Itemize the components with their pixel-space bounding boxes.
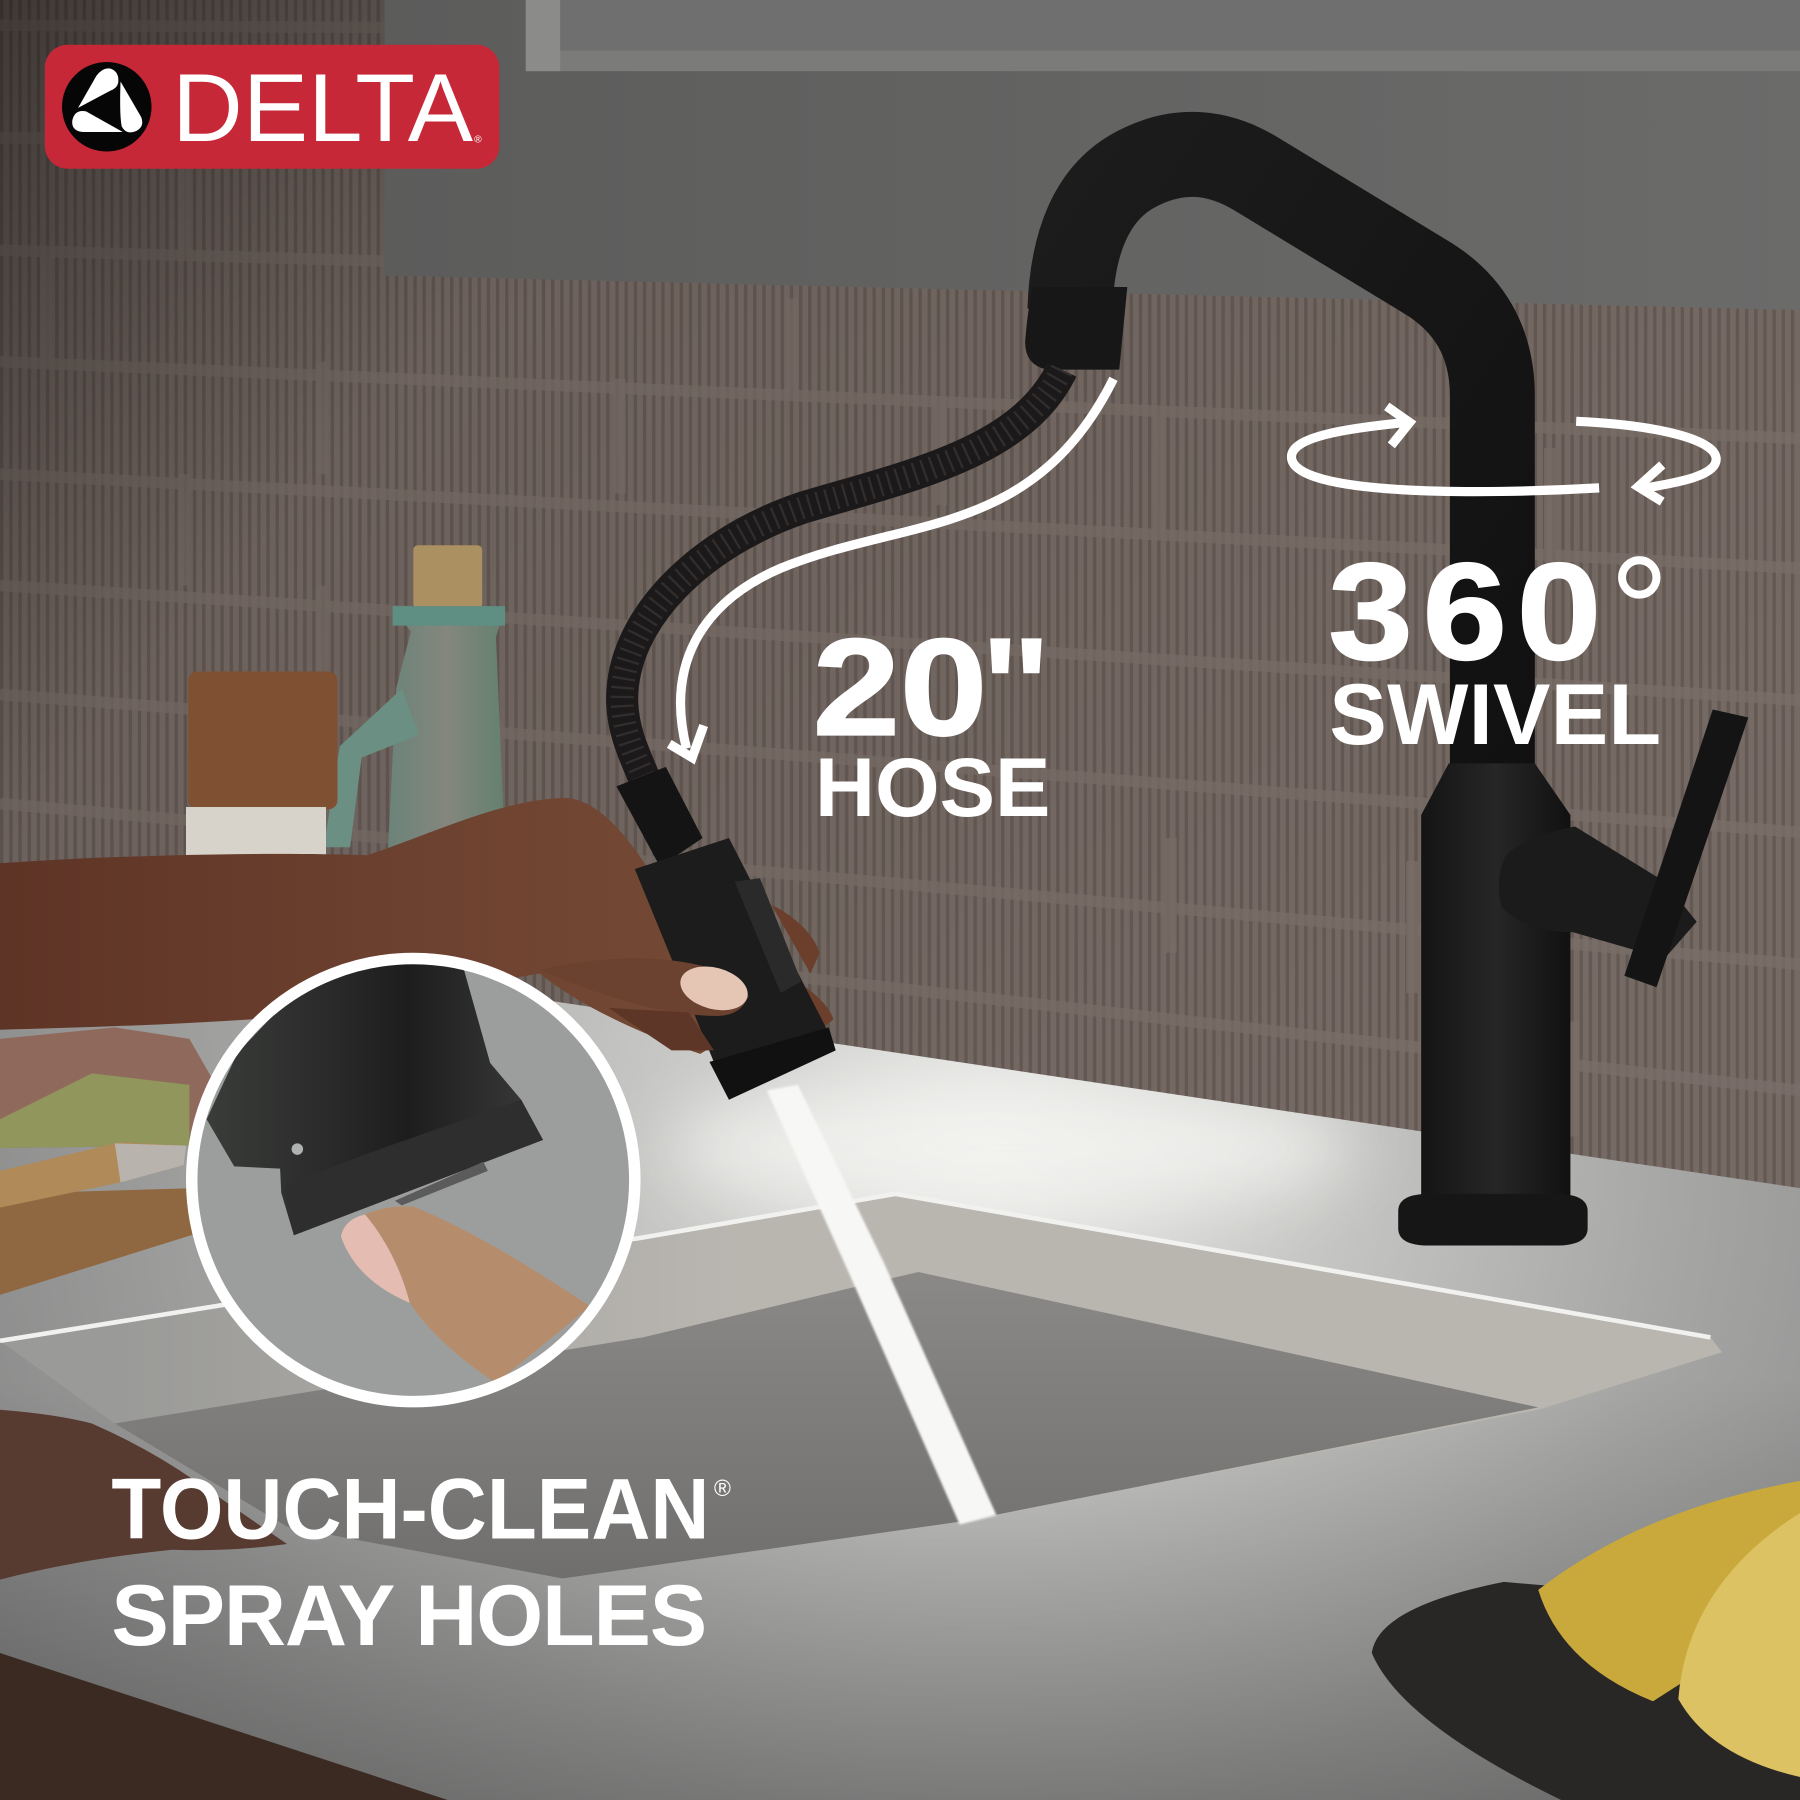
callout: 20 inch label: 20 — [813, 611, 987, 765]
pull-down sprayer head — [616, 767, 836, 1100]
logo wordmark: DELTA — [172, 55, 474, 162]
spray holes — [395, 1162, 488, 1205]
registered mark: ® — [474, 134, 482, 145]
arm and hand holding sprayer — [0, 798, 833, 1054]
fingernail — [341, 1215, 410, 1303]
faucet — [1025, 154, 1748, 1246]
heading: spray holes: SPRAY HOLES — [111, 1568, 707, 1664]
thumb and fingernail — [540, 958, 753, 1050]
tiled kitchen wall — [0, 0, 1800, 1263]
finger pressing spray holes — [365, 1206, 590, 1383]
faucet base column — [1421, 763, 1570, 1205]
lever — [1624, 709, 1748, 987]
wood cabinet below counter — [0, 1653, 448, 1800]
callout: 360 swivel arrow — [1291, 406, 1716, 502]
water stream — [767, 1085, 996, 1524]
registered mark: ® — [714, 1475, 731, 1501]
countertop — [0, 918, 1800, 1800]
upper cabinet and window — [385, 0, 1800, 310]
braided hose — [622, 370, 1062, 781]
bottle with cork — [324, 545, 505, 849]
hand resting on counter — [0, 1410, 287, 1580]
logo: Delta — [45, 45, 499, 169]
inset: touch-clean spray holes detail — [192, 953, 635, 1402]
sink basin — [0, 1194, 1722, 1578]
sprayer highlight — [292, 1143, 303, 1155]
callout: hose label: HOSE — [815, 740, 1050, 834]
callout: 20 inch label — [813, 608, 1052, 765]
lettuce, knife and cutting board — [0, 1027, 216, 1295]
nozzle — [1025, 287, 1127, 370]
sprayer close-up — [207, 953, 543, 1235]
callout: 360 degree label: 360 — [1328, 534, 1601, 688]
spout — [1070, 154, 1492, 792]
sprayer collar — [285, 1100, 543, 1235]
degree ring — [1622, 560, 1657, 595]
inch mark: " — [980, 608, 1052, 765]
logo emblem — [62, 62, 152, 152]
heading: touch-clean: TOUCH-CLEAN — [111, 1461, 709, 1557]
handle hub — [1499, 827, 1697, 959]
callout: swivel label: SWIVEL — [1329, 667, 1661, 763]
plate and lemons — [1372, 1481, 1800, 1800]
callout: hose length arrow — [669, 379, 1114, 758]
foot — [1398, 1194, 1588, 1246]
wooden canister — [186, 672, 338, 858]
